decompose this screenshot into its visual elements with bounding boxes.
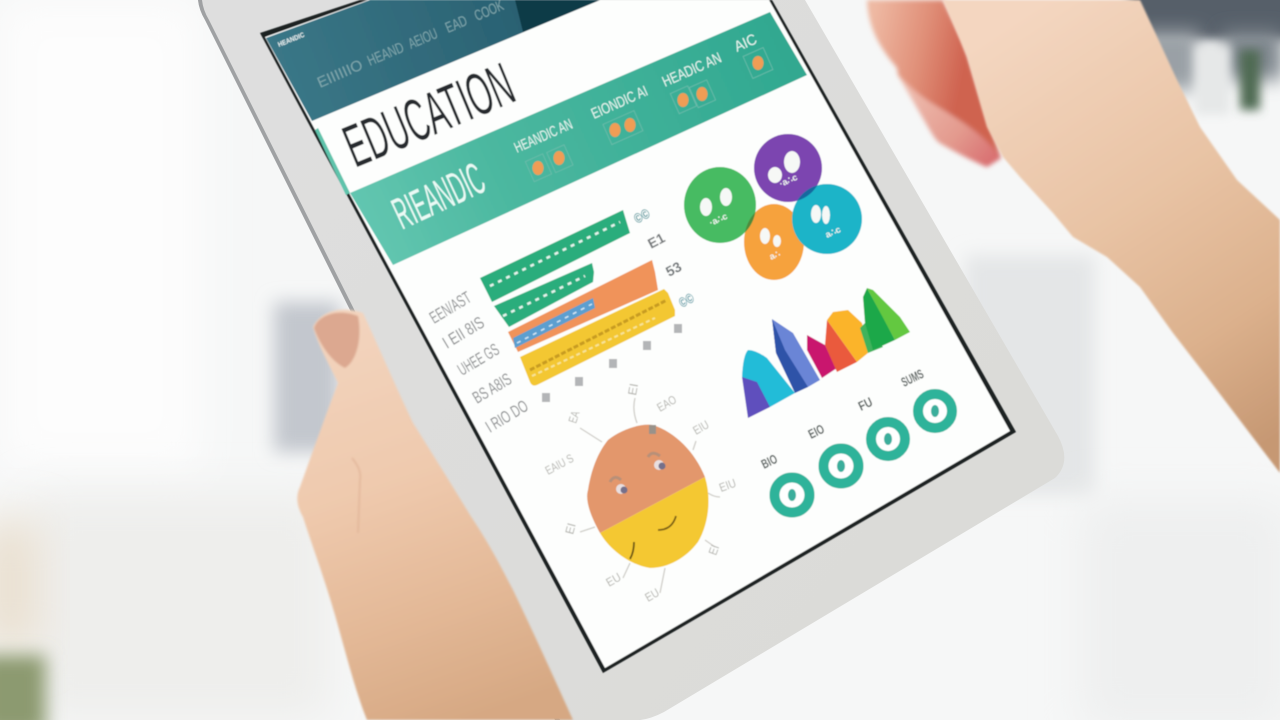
green bar one <box>480 210 630 302</box>
tablet body <box>198 0 1064 720</box>
ribbon left accent <box>315 128 350 195</box>
green bar two <box>494 263 594 327</box>
teal peak <box>742 350 795 407</box>
palm crease <box>352 458 360 533</box>
bar row labels: BS A8IS <box>469 370 515 407</box>
header small text <box>315 0 506 92</box>
ring icon labels: EIO <box>806 421 827 442</box>
ribbon labels <box>512 31 760 157</box>
yellow bar <box>520 289 675 386</box>
egg labels: EAIU S <box>543 451 576 478</box>
yellow peak <box>827 310 868 362</box>
circle captions: ·a∴c <box>708 211 729 228</box>
bar value labels: ©© <box>631 205 653 227</box>
horizontal bar chart <box>426 205 697 436</box>
egg labels: EIU <box>690 417 711 438</box>
ring icon labels: SUMS <box>899 366 926 390</box>
egg upper half <box>587 425 705 533</box>
circle captions <box>708 172 842 262</box>
egg labels: EI <box>562 522 579 536</box>
egg labels: EIU <box>717 476 738 495</box>
back of right hand and wrist <box>943 0 1280 473</box>
ring icon labels: FU <box>856 394 875 414</box>
teal ribbon <box>350 12 807 265</box>
venn circles <box>684 134 862 280</box>
orange bar <box>508 260 658 352</box>
screen <box>260 0 1016 673</box>
bar value labels: 53 <box>663 258 684 280</box>
face <box>610 425 676 559</box>
ribbon label three: HEADIC AN <box>660 49 724 91</box>
bar value labels: ©© <box>676 289 697 311</box>
circle icons <box>700 151 830 247</box>
thumbnail <box>314 313 359 368</box>
header small text: EIIIIIIO <box>315 57 365 92</box>
ribbon label four: AIC <box>732 31 760 56</box>
green peak <box>860 323 883 353</box>
egg labels: EI <box>625 382 641 397</box>
ribbon label two: EIONDIC AI <box>589 83 650 123</box>
leader lines <box>580 398 720 593</box>
bar row labels: I EII 8IS <box>439 313 488 352</box>
header small text: AEIOU <box>406 25 440 53</box>
circle captions: a∴c <box>824 224 842 240</box>
red-orange peak <box>825 320 857 372</box>
ring icons <box>774 394 952 512</box>
dark header band <box>266 0 600 121</box>
circle captions: a∴ <box>768 248 782 262</box>
header brand label: HEANDIC <box>277 32 306 49</box>
bar value labels <box>631 205 697 311</box>
ring icon one <box>774 478 810 512</box>
ring icon two <box>824 448 858 484</box>
egg labels: EA <box>566 409 583 425</box>
mountain chart <box>742 288 910 418</box>
bar inner labels <box>490 222 620 343</box>
bar row labels: I RIO DO <box>482 396 531 436</box>
ring icon labels <box>759 366 926 472</box>
screen: RIEANDIC <box>385 153 492 239</box>
bar row labels <box>426 288 531 436</box>
ring icon three <box>871 422 905 456</box>
header small text: HEAND <box>365 39 407 70</box>
header small text: EAD <box>443 12 470 37</box>
ring icon labels: BIO <box>759 451 780 472</box>
bar row labels: UHEE GS <box>454 340 503 379</box>
ring icon four <box>918 394 952 428</box>
blue peak <box>772 319 820 393</box>
bar value labels: E1 <box>645 229 668 252</box>
egg labels <box>543 382 738 605</box>
egg labels: EI <box>706 543 722 557</box>
egg lower half <box>600 477 709 568</box>
bar axis ticks <box>542 324 682 402</box>
left hand with thumb <box>297 310 573 720</box>
blue strip <box>513 298 595 348</box>
egg labels: EU <box>642 585 662 605</box>
ribbon icons <box>525 48 773 182</box>
magenta peak <box>807 335 837 378</box>
egg character chart <box>543 382 738 605</box>
egg labels: EAO <box>654 392 679 415</box>
bar row labels: EEN/AST <box>426 288 475 327</box>
purple peak <box>742 377 770 418</box>
lower finger <box>898 75 1001 167</box>
circle captions: ·a∴c <box>778 172 799 189</box>
ribbon label one: HEANDIC AN <box>512 116 575 157</box>
curled fingers of right hand <box>867 0 1001 167</box>
egg labels: EU <box>604 570 623 590</box>
